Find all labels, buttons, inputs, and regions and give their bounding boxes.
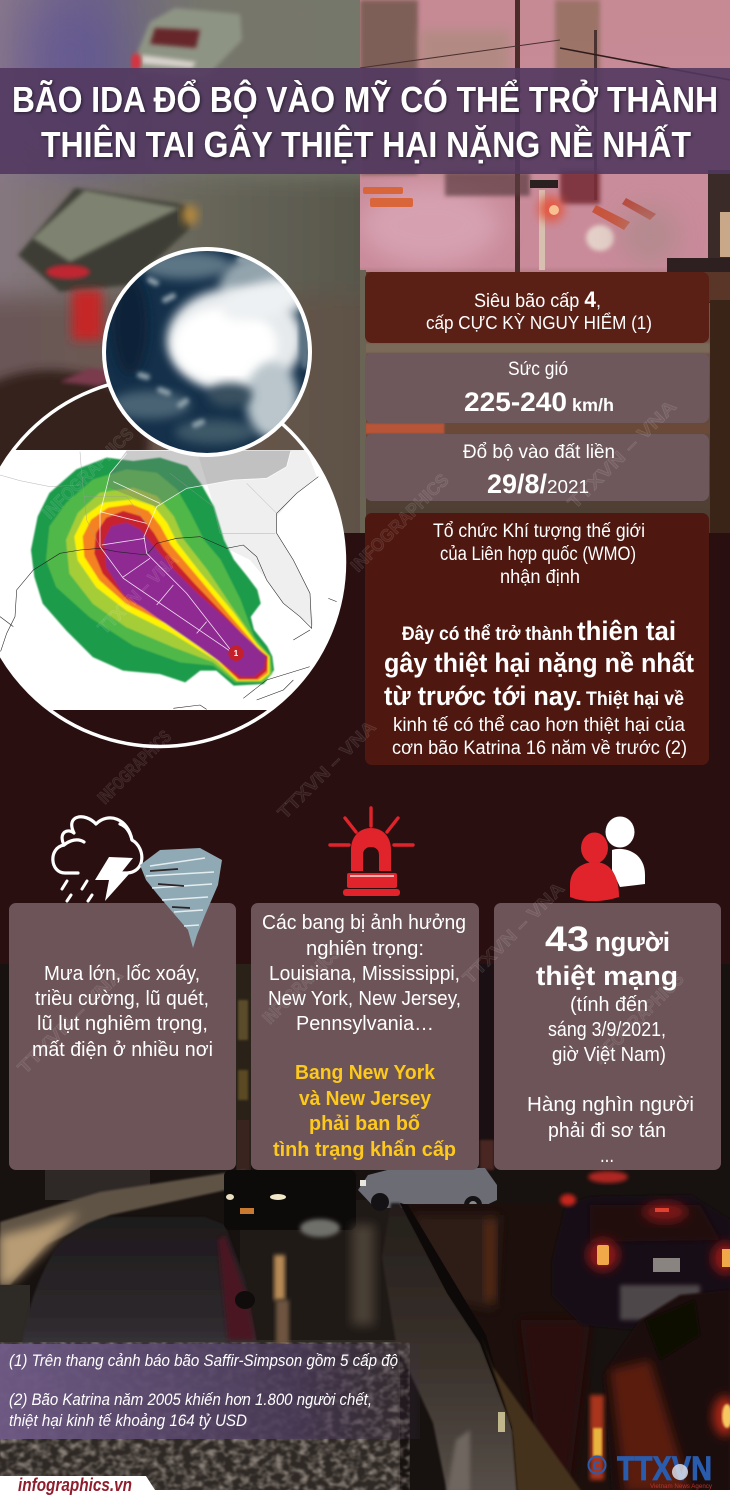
panel: casualties card [494, 903, 721, 1170]
emergency declaration highlight: Bang New York [295, 1062, 436, 1084]
panel: WMO assessment: thiên tai [577, 616, 676, 646]
panel: affected states card: nghiên trọng: [306, 938, 424, 960]
forecast cone shading [107, 451, 291, 507]
title text [12, 77, 718, 165]
watermarks: INFOGRAPHICS [347, 470, 453, 576]
forecast track cone outline [100, 452, 291, 653]
panel: WMO assessment: từ trước tới nay. [384, 681, 582, 711]
storm position marker: 1 [234, 649, 239, 658]
panel: WMO assessment: gây thiệt hại nặng nề nhất [384, 648, 694, 678]
land area east of the gulf [197, 450, 317, 627]
near car right [603, 1290, 730, 1492]
panel: wind speed: Sức gió [508, 359, 568, 380]
panel: impacts card: lũ lụt nghiêm trọng, [37, 1013, 208, 1035]
watermarks: TTXVN – VNA [94, 549, 182, 638]
logo: TTXVN: Vietnam News Agency [650, 1484, 712, 1490]
watermarks: TTXVN – VNA [14, 965, 127, 1078]
icon: people [570, 816, 645, 901]
panel: casualties card: Hàng nghìn người [527, 1094, 694, 1116]
panel: affected states card: Các bang bị ảnh hưởng [262, 912, 466, 934]
panel: casualties card: phải đi sơ tán [548, 1120, 666, 1142]
panel: casualties card: người [595, 927, 670, 957]
panel: affected states card: Pennsylvania… [296, 1013, 434, 1035]
panel: wind speed: 225-240 [464, 387, 567, 417]
footnote band [0, 1344, 420, 1439]
watermarks: INFOGRAPHICS [589, 969, 688, 1068]
watermarks: TTXVN – VNA [274, 717, 380, 823]
coastline and borders [0, 477, 318, 653]
right road [400, 1204, 488, 1209]
icon: storm cloud with lightning [53, 817, 142, 901]
panel: storm category: cấp CỰC KỲ NGUY HIỂM (1) [426, 312, 652, 333]
storm position marker [228, 646, 244, 661]
hurricane forecast map in circle [0, 378, 345, 746]
footnote band: (1) Trên thang cảnh báo bão Saffir-Simpson gồm 5 cấp độ [9, 1351, 398, 1370]
panel: impacts card: mất điện ở nhiều nơi [32, 1039, 213, 1061]
panel: casualties card: (tính đến [570, 994, 648, 1016]
photo: flooded intersection, top right [360, 0, 730, 533]
title band [0, 68, 730, 174]
logo: TTXVN: C [593, 1459, 602, 1473]
rain speckle [0, 1342, 410, 1492]
road reflections [274, 1255, 285, 1300]
panel: storm category [365, 272, 709, 343]
logo: TTXVN: TTXVN [617, 1450, 712, 1488]
panel: impacts card [9, 903, 236, 1170]
emergency declaration highlight [273, 1062, 456, 1161]
footer white strip and source tab: infographics.vn [18, 1475, 132, 1495]
silver car [358, 1168, 497, 1208]
watermarks: TTXVN – VNA [459, 878, 568, 988]
panel: WMO assessment: Đây có thể trở thành [402, 624, 573, 645]
footer white strip and source tab [0, 1475, 730, 1500]
panel: WMO assessment: Tổ chức Khí tượng thế giới [433, 521, 645, 542]
panel: wind speed: km/h [572, 395, 614, 415]
emergency declaration highlight: phải ban bố [309, 1113, 420, 1135]
panel: affected states card [251, 903, 479, 1170]
footnote band: (2) Bão Katrina năm 2005 khiến hơn 1.800 người chết, [9, 1390, 372, 1409]
panel: WMO assessment: Thiệt hại về [586, 689, 684, 710]
emergency declaration highlight: và New Jersey [299, 1088, 432, 1110]
panel: casualties card: ... [600, 1145, 614, 1167]
icon: tornado [140, 848, 222, 948]
watermarks: INFOGRAPHICS [39, 424, 138, 523]
panel: WMO assessment: cơn bão Katrina 16 năm về trước (2) [392, 738, 687, 759]
road [240, 1200, 394, 1340]
panel: WMO assessment: của Liên hợp quốc (WMO) [440, 544, 636, 565]
panel: impacts card: Mưa lớn, lốc xoáy, [44, 963, 200, 985]
watermarks [14, 396, 688, 1078]
panel: landfall date [365, 434, 709, 501]
panel: storm category: Siêu bão cấp 4, [474, 287, 601, 312]
satellite image of the storm in circle [104, 249, 320, 455]
photo: flooded underpass at night, bottom [0, 964, 730, 1492]
SUV right [552, 1221, 598, 1326]
panel: casualties card: thiệt mạng [536, 961, 678, 991]
panel: landfall date: 29/8/ [487, 469, 547, 499]
watermarks: INFOGRAPHICS [259, 943, 344, 1028]
left wall [45, 1170, 150, 1200]
panel: wind speed [365, 353, 709, 423]
panel: landfall date: Đổ bộ vào đất liền [463, 442, 615, 463]
panel: casualties card: sáng 3/9/2021, [548, 1019, 666, 1041]
panel: WMO assessment: nhận định [500, 567, 580, 588]
watermarks: INFOGRAPHICS [94, 727, 175, 808]
parked van [22, 1216, 256, 1344]
panel: casualties card: 43 [545, 920, 589, 959]
concrete divider [382, 1203, 517, 1492]
oncoming dark car [224, 1170, 356, 1230]
panel: WMO assessment: kinh tế có thể cao hơn thiệt hại của [393, 715, 685, 736]
emergency declaration highlight: tình trạng khẩn cấp [273, 1139, 456, 1161]
panel: affected states card: New York, New Jersey, [268, 988, 461, 1010]
panel: impacts card: triều cường, lũ quét, [35, 988, 209, 1010]
icon: red emergency siren [330, 808, 413, 896]
wind field: bands [32, 458, 273, 685]
photo: flooded street with cars, top left [0, 0, 360, 533]
panel: WMO assessment [365, 513, 709, 765]
footnote band: thiệt hại kinh tế khoảng 164 tỷ USD [9, 1411, 247, 1430]
panel: landfall date: 2021 [547, 477, 589, 497]
panel: casualties card: giờ Việt Nam) [552, 1044, 666, 1066]
panel: affected states card: Louisiana, Mississippi, [269, 963, 460, 985]
logo: TTXVN [588, 1450, 712, 1490]
watermarks: TTXVN – VNA [564, 396, 680, 513]
